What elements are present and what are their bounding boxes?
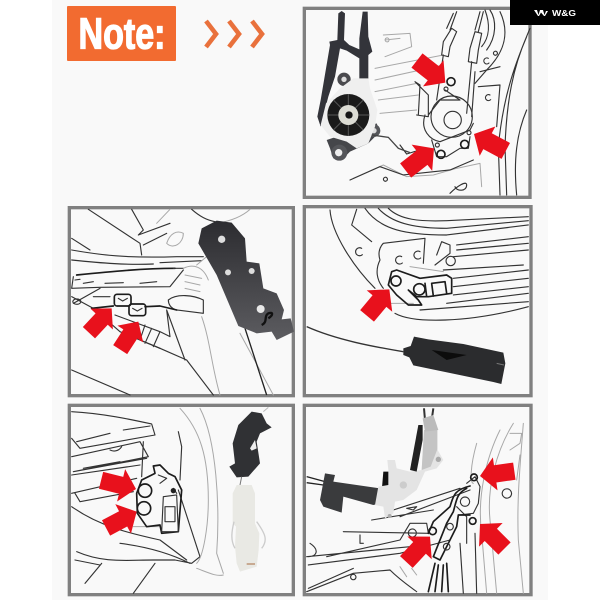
brand tag: W&G	[552, 9, 576, 18]
icon: black cable connector	[307, 327, 505, 384]
panel: bottom right cable diagram	[304, 405, 531, 595]
arrow: lower right	[468, 512, 516, 560]
note badge: Note:	[78, 10, 166, 58]
brand tag	[510, 0, 600, 25]
icon: cable fork and gear part	[317, 11, 410, 161]
icon: black regulator plate	[198, 221, 294, 340]
arrow: lower left	[394, 525, 442, 573]
panel: top right motor diagram	[304, 8, 530, 197]
line drawing: door frame and cables	[307, 423, 523, 593]
panel: middle left connector diagram	[69, 208, 294, 396]
icon: regulator with black cable strap	[307, 408, 443, 518]
arrow: top	[407, 47, 456, 96]
line drawing: door seat frame	[330, 208, 528, 320]
arrow: bottom left	[395, 135, 444, 184]
arrow: upper	[97, 464, 140, 505]
line drawing: door frame and motor	[350, 10, 530, 195]
arrow: top right	[478, 455, 517, 493]
icon: white clip	[232, 485, 265, 572]
arrow	[354, 279, 402, 327]
icon: three chevrons	[206, 21, 262, 47]
arrow: right	[466, 119, 514, 166]
line drawing: door shell	[72, 408, 223, 593]
panel: middle right latch diagram	[304, 207, 531, 396]
line drawing: door interior	[72, 209, 273, 395]
arrow: left	[78, 298, 123, 343]
arrow: lower	[98, 497, 144, 543]
arrow: right	[107, 313, 151, 358]
icon: black sector part	[229, 407, 272, 485]
panel: bottom left bracket diagram	[69, 405, 293, 595]
